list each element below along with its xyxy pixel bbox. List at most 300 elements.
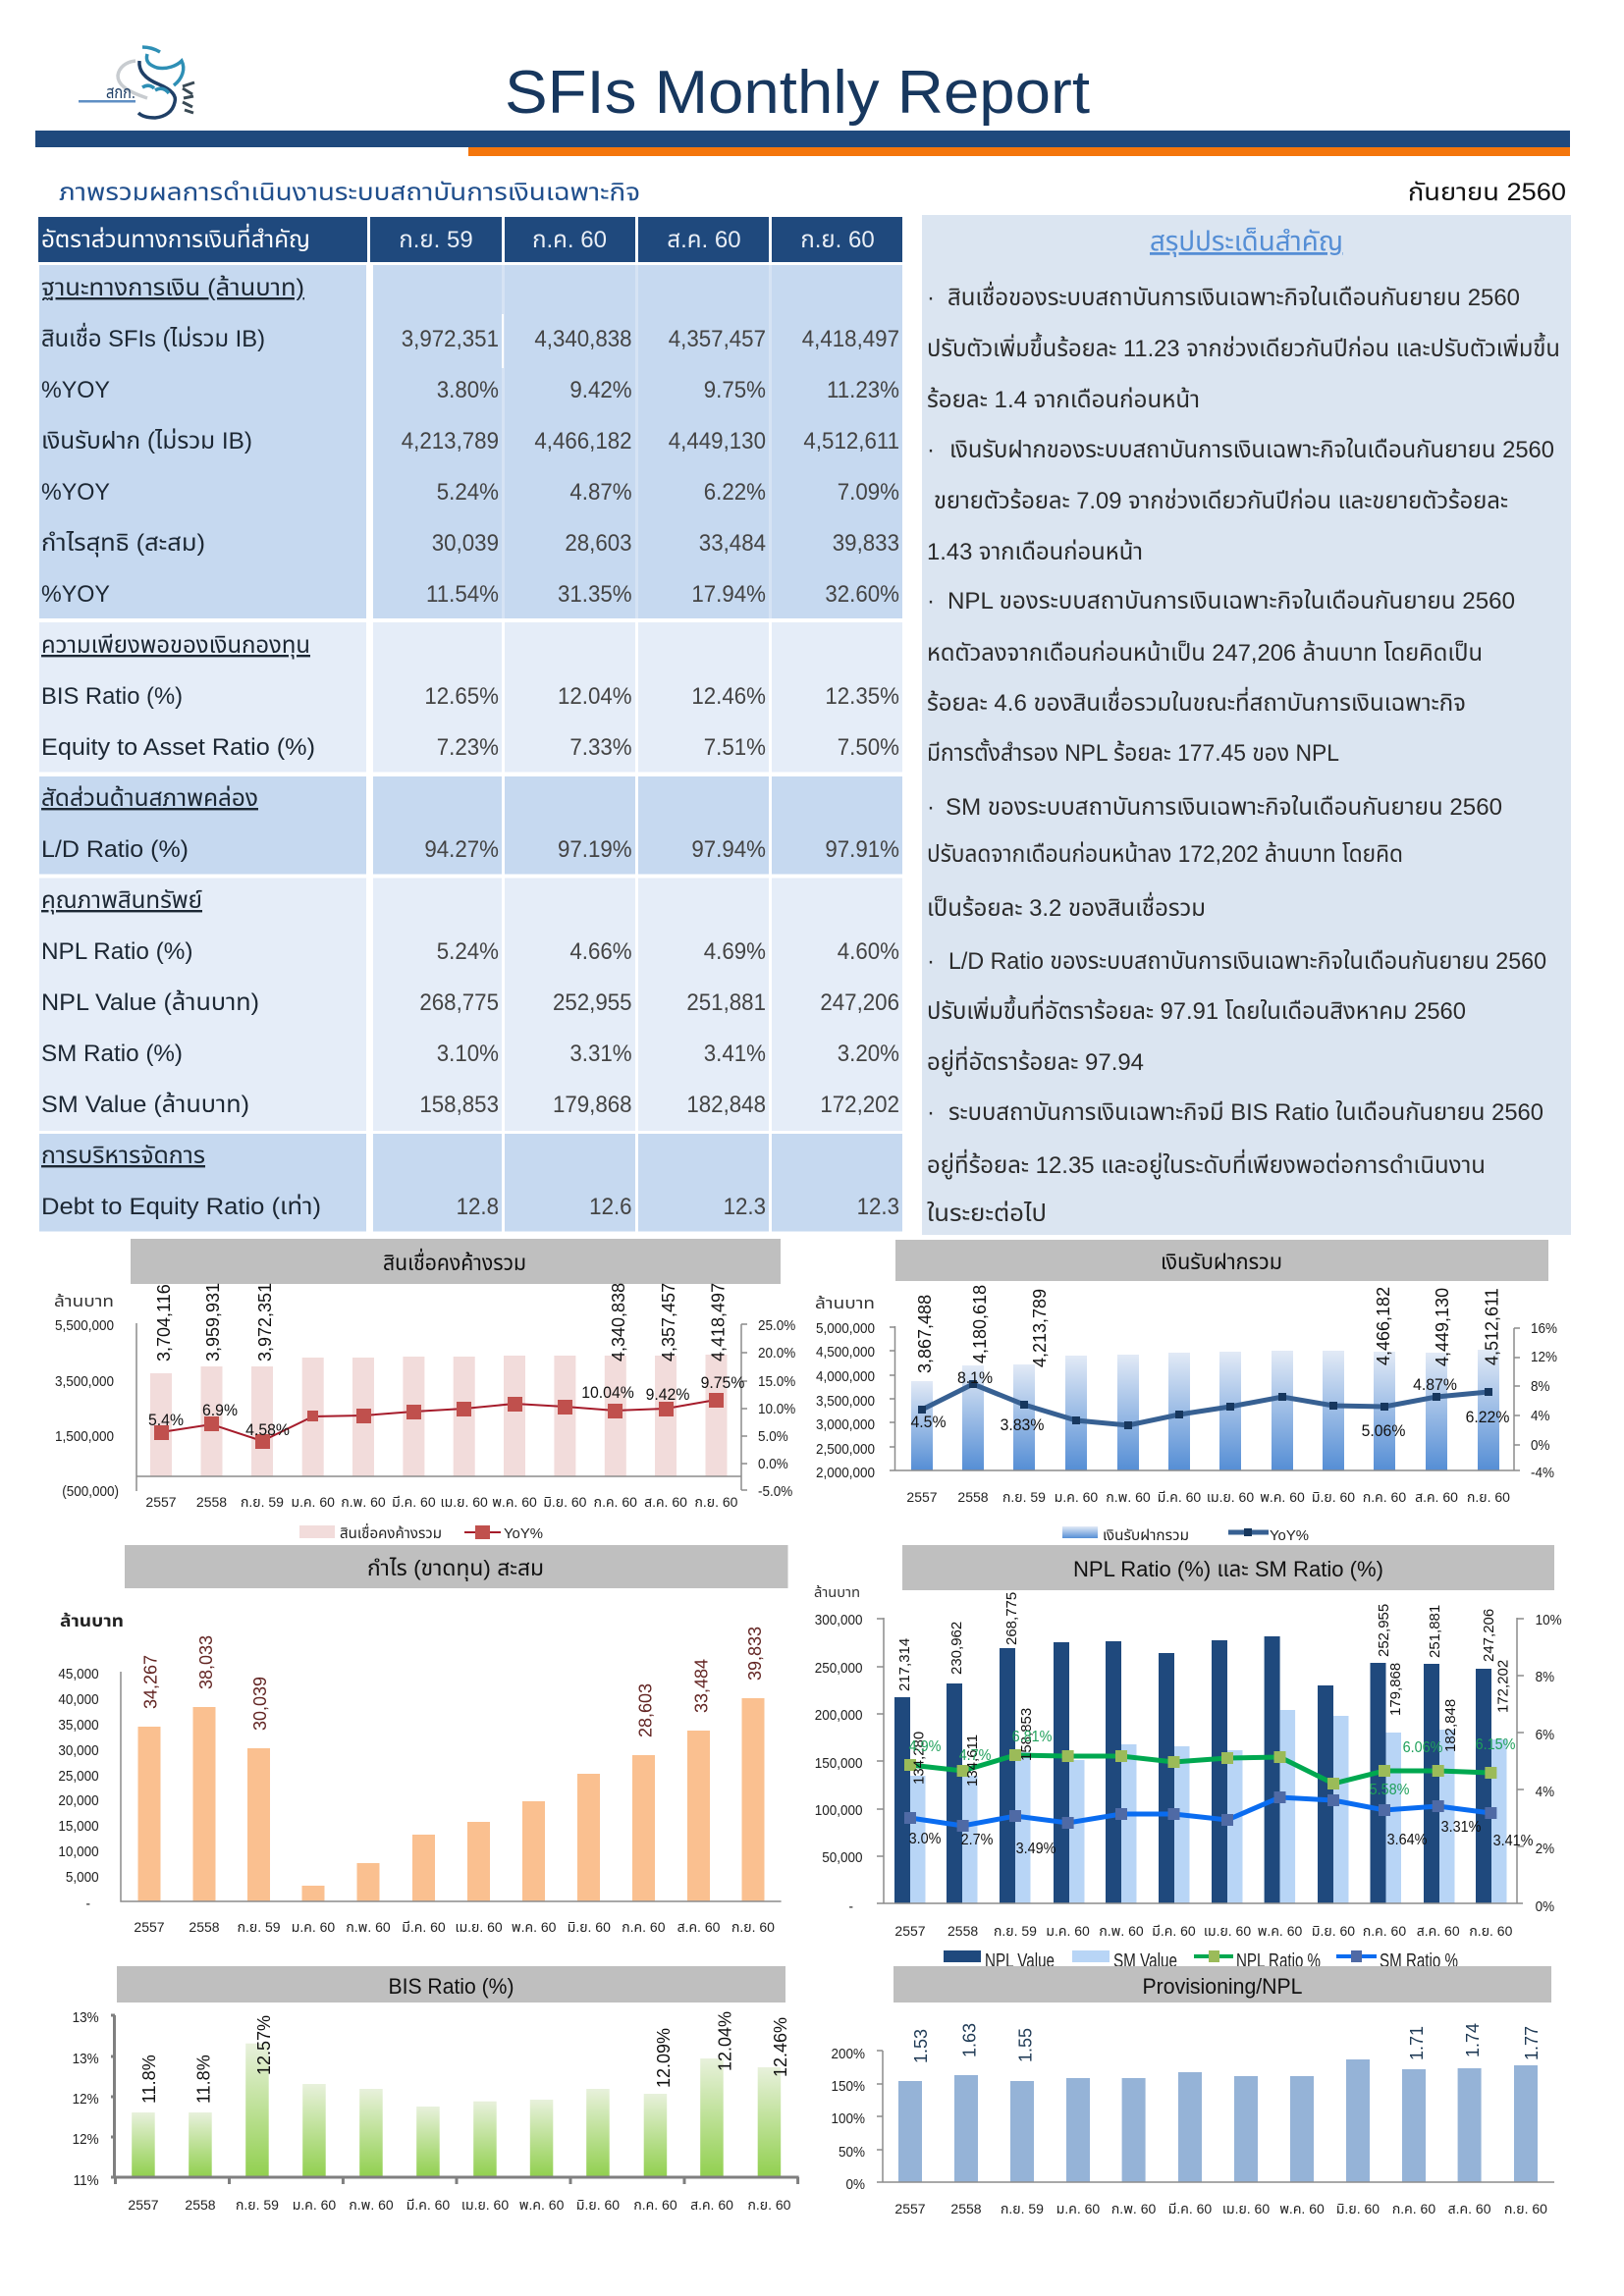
row: equity to asset: 7.50%	[838, 733, 899, 760]
YoY data labels	[148, 1374, 744, 1439]
y axis labels: 150,000	[815, 1755, 863, 1772]
row: equity to asset: 7.23%	[437, 733, 499, 760]
legend	[299, 1522, 543, 1542]
chart heading	[117, 1966, 785, 2002]
summary heading: สรุปประเด็นสำคัญ	[1150, 226, 1343, 257]
SM value labels: 179,868	[1387, 1663, 1404, 1716]
bar value labels: 30,039	[250, 1677, 270, 1731]
row: equity to asset: 7.33%	[569, 733, 632, 760]
secondary axis labels: 4%	[1536, 1784, 1554, 1800]
legend	[1062, 1526, 1309, 1544]
category labels: พ.ค. 60	[1258, 1923, 1302, 1939]
summary: LD ratio	[927, 948, 1546, 1077]
summary: SM: ปรับลดจากเดือนก่อนหน้าลง 172,202 ล้านบาท โดยคิด	[927, 840, 1403, 868]
y axis labels: 35,000	[58, 1717, 99, 1734]
row: BIS ratio: 12.04%	[558, 682, 632, 709]
SM ratio labels: 3.41%	[1493, 1832, 1533, 1849]
category labels: ก.พ. 60	[1099, 1923, 1144, 1939]
legend: NPL Value	[985, 1950, 1055, 1972]
category labels: ม.ค. 60	[292, 1919, 335, 1935]
category labels: ก.ย. 59	[994, 1923, 1037, 1939]
chart heading	[895, 1240, 1548, 1281]
row: SM value: 172,202	[820, 1091, 899, 1117]
row: NPL value: 252,955	[553, 988, 632, 1015]
chart: provisioning to NPL	[832, 1966, 1554, 2216]
row: loans: 4,340,838	[534, 325, 632, 351]
legend	[944, 1950, 1458, 1972]
row: debt to equity: 12.6	[589, 1193, 632, 1219]
bar value labels: 34,267	[141, 1655, 161, 1709]
row: profit yoy: 31.35%	[558, 580, 632, 607]
row: debt to equity: Debt to Equity Ratio (เท่า)	[41, 1193, 321, 1220]
YoY data labels: 9.42%	[646, 1386, 689, 1404]
category labels: ส.ค. 60	[1417, 1923, 1460, 1939]
row: LD ratio: 94.27%	[424, 835, 499, 862]
row: deposits yoy: 4.87%	[569, 478, 632, 505]
category labels: ม.ค. 60	[293, 2197, 336, 2213]
bar value labels: 4,357,457	[659, 1283, 678, 1362]
axis unit: ล้านบาท	[814, 1584, 860, 1600]
chart heading: กำไร (ขาดทุน) สะสม	[367, 1556, 544, 1581]
row: SM value: 179,868	[553, 1091, 632, 1117]
table header row: อัตราส่วนทางการเงินที่สำคัญ	[41, 223, 310, 253]
category labels: มี.ค. 60	[1168, 2201, 1212, 2216]
summary: deposits: ขยายตัวร้อยละ 7.09 จากช่วงเดียวกันปีก่อน และขยายตัวร้อยละ	[934, 487, 1508, 514]
SM ratio line	[904, 1791, 1496, 1832]
table header row	[38, 217, 902, 262]
axis unit: ล้านบาท	[54, 1294, 114, 1310]
secondary axis labels: 0%	[1531, 1437, 1550, 1454]
secondary axis labels: 16%	[1531, 1320, 1557, 1337]
section heading: capital adequacy: ความเพียงพอของเงินกองทุน	[41, 632, 310, 660]
summary: LD ratio: ปรับเพิ่มขึ้นที่อัตราร้อยละ 97.91 โดยในเดือนสิงหาคม 2560	[927, 994, 1466, 1025]
bar value labels: 1.63	[960, 2023, 980, 2057]
bar value labels: 4,213,789	[1030, 1289, 1050, 1367]
row: BIS ratio: 12.46%	[691, 682, 766, 709]
category labels: ก.ย. 60	[1504, 2201, 1547, 2216]
row: net profit: 28,603	[565, 529, 632, 556]
category labels: มิ.ย. 60	[1336, 2201, 1380, 2216]
bar value labels: 1.55	[1015, 2028, 1035, 2062]
bar value labels: 12.04%	[715, 2011, 734, 2071]
summary: SM: เป็นร้อยละ 3.2 ของสินเชื่อรวม	[927, 891, 1206, 922]
SM value labels: 134,280	[910, 1732, 927, 1785]
category labels	[894, 2201, 1547, 2216]
NPL ratio labels: 4.9%	[909, 1737, 941, 1755]
category labels: 2557	[128, 2197, 159, 2213]
bar value labels	[141, 1627, 765, 1737]
secondary axis labels	[758, 1317, 796, 1500]
NPL ratio line	[904, 1749, 1496, 1789]
table header row: ก.ย. 59	[399, 227, 473, 253]
SM value labels: 134,611	[964, 1735, 981, 1787]
bar value labels: 4,418,497	[709, 1283, 729, 1362]
category labels: มี.ค. 60	[406, 2197, 450, 2213]
category labels: พ.ค. 60	[492, 1494, 537, 1510]
y axis labels: 200%	[832, 2046, 865, 2062]
axes	[877, 2051, 1554, 2182]
bar value labels: 38,033	[196, 1635, 216, 1689]
y axis labels: 13%	[73, 2051, 99, 2067]
category labels: 2558	[950, 2201, 982, 2216]
YoY data labels: 8.1%	[957, 1369, 993, 1387]
category labels: 2558	[196, 1494, 227, 1510]
row: loans yoy: 9.75%	[704, 376, 766, 402]
summary: deposits: เงินรับฝากของระบบสถาบันการเงินเฉพาะกิจในเดือนกันยายน 2560	[949, 437, 1554, 463]
category labels: ม.ค. 60	[1056, 2201, 1100, 2216]
category labels: ก.ย. 60	[1467, 1489, 1510, 1505]
legend: เงินรับฝากรวม	[1103, 1527, 1189, 1544]
NPL value bars	[894, 1636, 1491, 1903]
category labels: 2557	[134, 1919, 165, 1935]
secondary axis labels: 2%	[1536, 1841, 1554, 1857]
y axis labels: 4,000,000	[816, 1368, 875, 1385]
bar value labels: 4,466,182	[1374, 1287, 1393, 1365]
row: loans: 4,418,497	[802, 325, 899, 351]
row: loans yoy: 11.23%	[827, 376, 899, 402]
category labels: ส.ค. 60	[644, 1494, 687, 1510]
row: net profit: กำไรสุทธิ (สะสม)	[41, 530, 205, 558]
category labels: มี.ค. 60	[1158, 1489, 1201, 1505]
y axis labels: 100%	[832, 2110, 865, 2127]
summary: BIS ratio	[927, 1099, 1543, 1227]
NPL value labels: 251,881	[1427, 1605, 1443, 1658]
row: deposits yoy	[41, 478, 899, 506]
YoY data labels: 5.4%	[148, 1412, 184, 1429]
bars	[898, 2059, 1538, 2182]
summary: loans: ปรับตัวเพิ่มขึ้นร้อยละ 11.23 จากช่วงเดียวกันปีก่อน และปรับตัวเพิ่มขึ้น	[927, 332, 1560, 362]
category labels: ก.ค. 60	[622, 1919, 666, 1935]
axes	[136, 1323, 747, 1491]
y axis labels: 3,500,000	[816, 1393, 875, 1410]
chart: total deposits	[815, 1240, 1557, 1544]
y axis labels: 250,000	[815, 1660, 863, 1677]
summary: loans: สินเชื่อของระบบสถาบันการเงินเฉพาะกิจในเดือนกันยายน 2560	[947, 281, 1520, 311]
category labels: ก.ย. 60	[748, 2197, 791, 2213]
y axis labels: 4,500,000	[816, 1344, 875, 1361]
category labels: 2557	[145, 1494, 177, 1510]
y axis labels: (500,000)	[62, 1483, 119, 1500]
y axis labels: 200,000	[815, 1707, 863, 1724]
NPL ratio labels: 6.06%	[1403, 1738, 1442, 1756]
row: SM value: 182,848	[686, 1091, 766, 1117]
bar value labels: 1.53	[911, 2029, 931, 2063]
row: NPL value: 247,206	[820, 988, 899, 1015]
row: NPL ratio: 4.66%	[569, 937, 632, 964]
y axis labels: 45,000	[58, 1666, 99, 1682]
category labels: 2558	[189, 1919, 220, 1935]
category labels: ก.ย. 60	[731, 1919, 775, 1935]
secondary axis labels: 12%	[1531, 1349, 1557, 1365]
summary: BIS ratio: อยู่ที่ร้อยละ 12.35 และอยู่ในระดับที่เพียงพอต่อการดำเนินงาน	[927, 1148, 1486, 1180]
bar value labels: 4,512,611	[1483, 1288, 1502, 1365]
bars	[150, 1355, 727, 1476]
y axis labels: 20,000	[58, 1792, 99, 1809]
category labels: ก.พ. 60	[1106, 1489, 1151, 1505]
y axis labels: 5,000	[66, 1869, 99, 1886]
row: loans yoy: %YOY	[41, 377, 110, 403]
bar value labels: 1.71	[1407, 2026, 1427, 2060]
row: SM ratio: 3.10%	[437, 1040, 499, 1066]
category labels: ก.ย. 59	[238, 1919, 281, 1935]
y axis labels	[58, 1666, 99, 1912]
secondary axis labels: 25.0%	[758, 1317, 796, 1334]
row: equity to asset: 7.51%	[704, 733, 766, 760]
YoY data labels: 3.83%	[1001, 1416, 1044, 1434]
icon: organisation logo: สกก.	[106, 82, 135, 102]
summary: LD ratio: ·	[927, 948, 935, 975]
category labels: ก.พ. 60	[341, 1494, 386, 1510]
category labels	[894, 1923, 1513, 1939]
bar value labels: 12.46%	[771, 2017, 790, 2077]
secondary axis labels: 4%	[1531, 1408, 1550, 1424]
y axis labels: 12%	[73, 2091, 99, 2108]
YoY data labels: 6.22%	[1466, 1409, 1509, 1426]
summary: SM: SM ของระบบสถาบันการเงินเฉพาะกิจในเดือนกันยายน 2560	[946, 794, 1502, 821]
secondary axis labels: 0%	[1536, 1898, 1554, 1915]
icon: organisation logo	[79, 47, 194, 118]
y axis labels: 1,500,000	[55, 1428, 114, 1445]
row: NPL ratio: 4.60%	[838, 937, 899, 964]
y axis labels	[55, 1317, 119, 1500]
category labels: มิ.ย. 60	[1312, 1923, 1355, 1939]
summary: NPL: ร้อยละ 4.6 ของสินเชื่อรวมในขณะที่สถาบันการเงินเฉพาะกิจ	[927, 686, 1466, 717]
row: net profit	[41, 529, 899, 558]
bar value labels: 1.77	[1522, 2026, 1542, 2060]
bars	[132, 2044, 781, 2176]
row: debt to equity	[41, 1193, 899, 1220]
row: equity to asset	[41, 733, 899, 761]
axes	[877, 1618, 1524, 1903]
NPL value labels: 268,775	[1003, 1592, 1020, 1645]
row: SM ratio: 3.20%	[838, 1040, 899, 1066]
category labels: ก.พ. 60	[349, 2197, 394, 2213]
category labels: มี.ค. 60	[402, 1919, 446, 1935]
chart heading: เงินรับฝากรวม	[1161, 1250, 1282, 1274]
y axis labels: 3,500,000	[55, 1373, 114, 1390]
chart: BIS ratio	[73, 1966, 799, 2213]
axis unit: ล้านบาท	[815, 1296, 875, 1312]
category labels: ส.ค. 60	[1448, 2201, 1491, 2216]
bar value labels: 11.8%	[139, 2055, 159, 2104]
NPL value labels	[896, 1592, 1497, 1691]
category labels: ก.พ. 60	[346, 1919, 391, 1935]
category labels: มิ.ย. 60	[1312, 1489, 1355, 1505]
secondary axis labels: 5.0%	[758, 1428, 788, 1445]
secondary axis labels: 10.0%	[758, 1401, 796, 1417]
YoY data labels: 5.06%	[1362, 1422, 1405, 1440]
bar value labels	[154, 1283, 729, 1362]
category labels	[128, 2197, 791, 2213]
NPL ratio labels: 6.81%	[1012, 1728, 1052, 1745]
row: SM value	[41, 1091, 899, 1118]
SM value bars	[910, 1710, 1506, 1903]
row: SM value: 158,853	[419, 1091, 499, 1117]
bar value labels: 12.57%	[254, 2015, 274, 2075]
row: NPL ratio: 4.69%	[704, 937, 766, 964]
category labels: ก.ย. 59	[1001, 2201, 1044, 2216]
YoY line	[154, 1393, 724, 1449]
row: NPL ratio: NPL Ratio (%)	[41, 938, 192, 965]
row: profit yoy: 32.60%	[825, 580, 899, 607]
NPL value labels: 217,314	[896, 1638, 913, 1691]
legend: สินเชื่อคงค้างรวม	[340, 1522, 442, 1542]
NPL value labels: 230,962	[948, 1622, 965, 1675]
panel: key points summary	[922, 215, 1571, 1235]
row: deposits yoy: %YOY	[41, 479, 110, 506]
bar value labels: 12.09%	[654, 2028, 674, 2088]
row: deposits: 4,449,130	[669, 427, 766, 454]
category labels: ม.ค. 60	[1055, 1489, 1098, 1505]
category labels: เม.ย. 60	[461, 2197, 509, 2213]
bar value labels	[911, 2023, 1542, 2063]
summary: BIS ratio: ในระยะต่อไป	[927, 1200, 1047, 1227]
row: NPL value: 251,881	[686, 988, 766, 1015]
row: NPL ratio: 5.24%	[437, 937, 499, 964]
section heading: asset quality: คุณภาพสินทรัพย์	[41, 887, 202, 915]
row: debt to equity: 12.8	[457, 1193, 499, 1219]
SM ratio labels: 3.31%	[1441, 1818, 1481, 1836]
summary: loans	[927, 281, 1560, 413]
secondary axis labels: -5.0%	[758, 1483, 793, 1500]
row: BIS ratio: 12.65%	[424, 682, 499, 709]
y axis labels: -	[849, 1898, 853, 1915]
chart: outstanding loans	[54, 1239, 796, 1542]
row: BIS ratio: BIS Ratio (%)	[41, 683, 183, 710]
category labels: มิ.ย. 60	[543, 1494, 587, 1510]
chart heading: BIS Ratio (%)	[389, 1974, 514, 1999]
summary: NPL	[927, 588, 1515, 767]
chart heading: สินเชื่อคงค้างรวม	[383, 1248, 526, 1275]
YoY data labels: 4.87%	[1413, 1376, 1457, 1394]
row: loans	[41, 322, 899, 352]
row: SM ratio: SM Ratio (%)	[41, 1041, 183, 1067]
row: deposits yoy: 7.09%	[838, 478, 899, 505]
y axis labels: 50,000	[822, 1849, 863, 1866]
table header row: ส.ค. 60	[667, 227, 741, 253]
y axis labels: 300,000	[815, 1612, 863, 1629]
summary: deposits: ·	[927, 437, 935, 463]
category labels: เม.ย. 60	[1222, 2201, 1270, 2216]
NPL ratio labels: 4.7%	[959, 1746, 991, 1764]
y axis labels: -	[86, 1896, 90, 1912]
row: SM ratio: 3.41%	[704, 1040, 766, 1066]
row: profit yoy: 11.54%	[426, 580, 499, 607]
SM ratio labels	[909, 1818, 1533, 1857]
row: NPL value: 268,775	[419, 988, 499, 1015]
row: LD ratio: 97.91%	[825, 835, 899, 862]
y axis labels: 13%	[73, 2009, 99, 2026]
summary: loans: ร้อยละ 1.4 จากเดือนก่อนหน้า	[927, 386, 1200, 413]
row: BIS ratio: 12.35%	[825, 682, 899, 709]
category labels	[145, 1494, 738, 1510]
SM ratio labels: 3.64%	[1387, 1831, 1427, 1848]
category labels: เม.ย. 60	[455, 1919, 503, 1935]
chart heading: NPL Ratio (%) และ SM Ratio (%)	[1073, 1557, 1383, 1581]
bar value labels: 11.8%	[194, 2055, 214, 2104]
summary: deposits	[927, 437, 1554, 565]
summary: loans: ·	[927, 285, 935, 311]
YoY data labels: 4.58%	[245, 1421, 290, 1439]
SM ratio labels: 3.0%	[909, 1830, 941, 1847]
summary: NPL: หดตัวลงจากเดือนก่อนหน้าเป็น 247,206 ล้านบาท โดยคิดเป็น	[927, 639, 1483, 667]
legend: SM Value	[1113, 1950, 1177, 1972]
secondary axis labels: 20.0%	[758, 1345, 796, 1362]
secondary axis labels: 10%	[1536, 1612, 1562, 1629]
panel: key financial ratios table	[38, 217, 902, 1231]
row: BIS ratio	[41, 682, 899, 710]
bars	[137, 1698, 764, 1901]
category labels: ก.ย. 59	[1002, 1489, 1046, 1505]
bar value labels: 3,867,488	[915, 1295, 935, 1373]
y axis labels	[832, 2046, 865, 2193]
y axis labels: 100,000	[815, 1802, 863, 1819]
SM ratio labels: 2.7%	[961, 1831, 993, 1848]
row: loans: 3,972,351	[402, 325, 499, 351]
y axis labels: 11%	[74, 2172, 99, 2189]
row: LD ratio	[41, 835, 899, 863]
category labels: 2558	[957, 1489, 989, 1505]
y axis labels: 40,000	[58, 1691, 99, 1708]
category labels	[134, 1919, 775, 1935]
row: SM ratio: 3.31%	[569, 1040, 632, 1066]
chart heading: Provisioning/NPL	[1143, 1974, 1302, 1999]
row: deposits yoy: 5.24%	[437, 478, 499, 505]
legend: YoY%	[504, 1525, 543, 1542]
bar value labels: 39,833	[745, 1627, 765, 1681]
secondary axis labels	[1531, 1320, 1557, 1481]
table header row: ก.ค. 60	[532, 227, 607, 253]
category labels: เม.ย. 60	[1204, 1923, 1251, 1939]
category labels: ส.ค. 60	[1415, 1489, 1458, 1505]
bar value labels: 4,180,618	[970, 1285, 990, 1363]
section heading: liquidity: สัดส่วนด้านสภาพคล่อง	[41, 784, 258, 812]
category labels: 2558	[185, 2197, 216, 2213]
category labels: พ.ค. 60	[519, 2197, 565, 2213]
title: SFIs Monthly Report	[505, 59, 1090, 127]
summary: NPL: มีการตั้งสำรอง NPL ร้อยละ 177.45 ของ NPL	[927, 737, 1339, 767]
category labels: มี.ค. 60	[392, 1494, 436, 1510]
row: debt to equity: 12.3	[857, 1193, 899, 1219]
bar value labels	[915, 1285, 1502, 1373]
y axis labels: 3,000,000	[816, 1416, 875, 1433]
category labels: 2557	[906, 1489, 938, 1505]
section heading: ภาพรวมผลการดำเนินงานระบบสถาบันการเงินเฉพาะกิจ	[59, 179, 640, 206]
axes	[111, 2015, 799, 2184]
row: deposits yoy: 6.22%	[704, 478, 766, 505]
chart heading	[893, 1966, 1551, 2002]
category labels: ก.ย. 60	[695, 1494, 738, 1510]
category labels: ม.ค. 60	[291, 1494, 335, 1510]
category labels: มิ.ย. 60	[576, 2197, 620, 2213]
NPL value labels: 247,206	[1481, 1609, 1497, 1662]
row: loans yoy	[41, 376, 899, 403]
category labels	[906, 1489, 1510, 1505]
row: NPL value: NPL Value (ล้านบาท)	[41, 989, 259, 1016]
y axis labels: 10,000	[58, 1843, 99, 1860]
category labels: ก.ค. 60	[1363, 1489, 1406, 1505]
row: loans yoy: 9.42%	[569, 376, 632, 402]
category labels: พ.ค. 60	[512, 1919, 557, 1935]
row: loans yoy: 3.80%	[437, 376, 499, 402]
row: LD ratio: L/D Ratio (%)	[41, 836, 189, 863]
legend: NPL Ratio %	[1236, 1950, 1321, 1972]
category labels: เม.ย. 60	[441, 1494, 488, 1510]
secondary axis labels: 8%	[1531, 1378, 1550, 1395]
row: deposits: เงินรับฝาก (ไม่รวม IB)	[41, 427, 252, 454]
row: LD ratio: 97.19%	[558, 835, 632, 862]
y axis labels	[815, 1612, 863, 1915]
